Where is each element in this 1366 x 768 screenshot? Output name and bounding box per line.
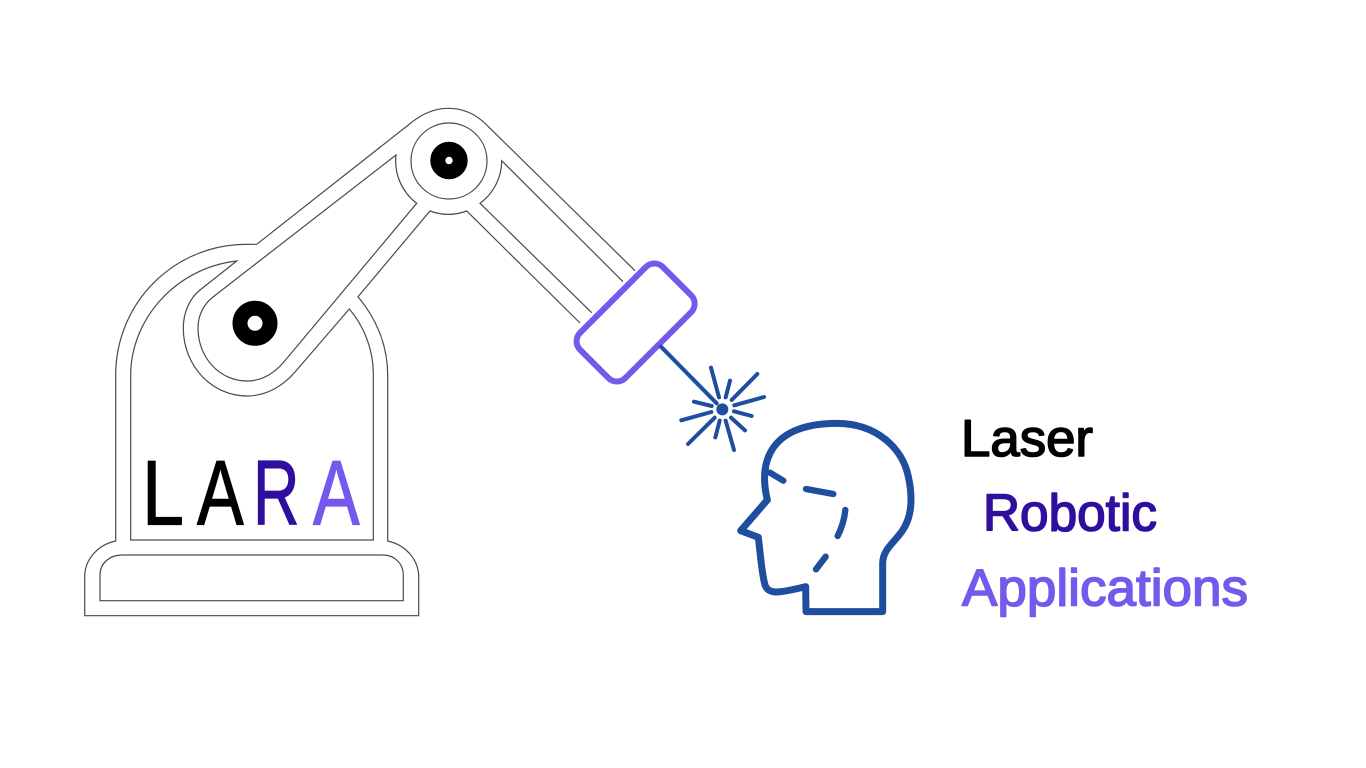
face treatment marks [770, 473, 845, 569]
robot arm [85, 108, 635, 616]
word: Laser: Laser [961, 410, 1093, 468]
letter A: A [313, 442, 360, 545]
icon: top joint bolt [438, 149, 460, 172]
icon: lower joint bolt [240, 308, 270, 338]
upper arm panel [198, 155, 417, 381]
forearm inner outline [480, 161, 623, 313]
head outline [741, 423, 911, 612]
word: Robotic: Robotic [983, 484, 1157, 542]
robot base panel [100, 555, 403, 601]
robot body panel [131, 261, 373, 540]
top joint ring [411, 123, 487, 199]
heading: Laser Robotic Applications [961, 410, 1248, 618]
laser beam and spark [661, 347, 764, 450]
laser head [572, 259, 700, 386]
letter A: A [197, 442, 244, 545]
letter L: L [142, 441, 184, 544]
spark rays [681, 368, 764, 450]
icon: human head [741, 423, 911, 612]
robot outer outline [85, 108, 635, 616]
laser beam [661, 347, 717, 403]
word: Applications: Applications [962, 560, 1248, 618]
LARA wordmark [142, 441, 360, 545]
letter R: R [253, 441, 300, 544]
spark centre [716, 403, 728, 415]
